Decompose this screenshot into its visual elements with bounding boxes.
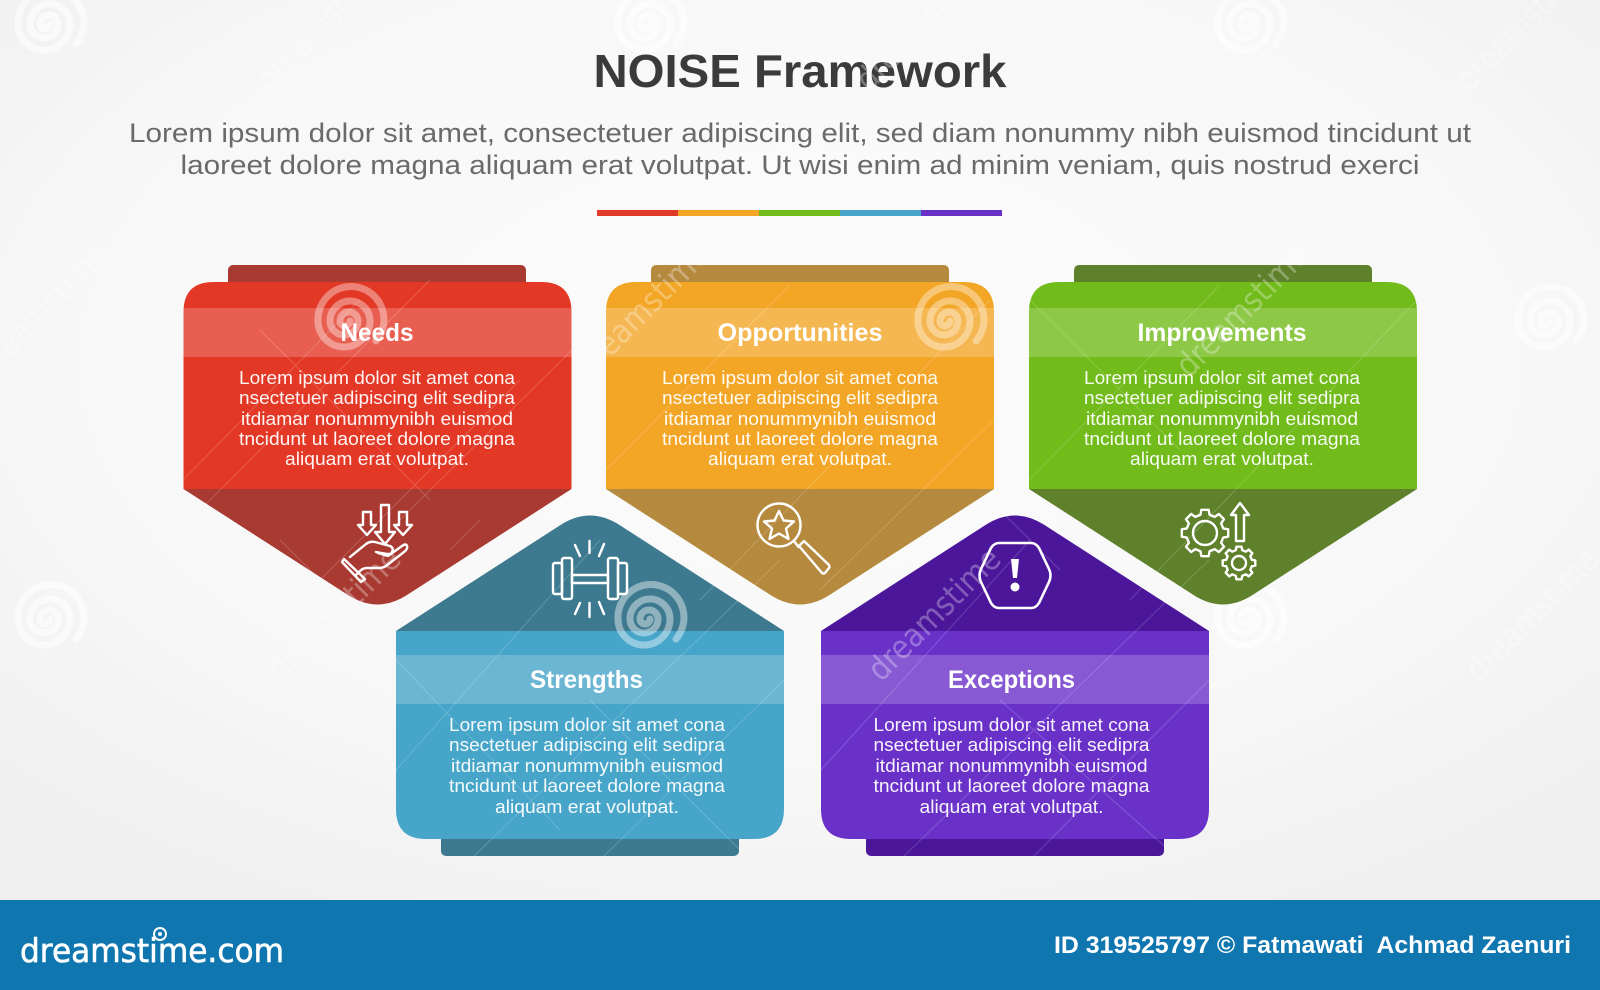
body text: [874, 715, 1151, 817]
subtitle: [129, 118, 1472, 180]
watermark overlay: dreamstime: [1167, 235, 1316, 384]
subtitle: Lorem ipsum dolor sit amet, consectetuer adipiscing elit, sed diam nonummy nibh euismod tincidunt ut: [129, 118, 1472, 148]
tab: [228, 265, 526, 282]
heading band: [821, 655, 1209, 704]
card body: [184, 282, 572, 489]
body text: nsectetuer adipiscing elit sedipra: [874, 735, 1151, 755]
icon: hand with arrows: [342, 505, 412, 582]
body text: tncidunt ut laoreet dolore magna: [874, 776, 1151, 796]
panel: Improvements: [1029, 265, 1417, 604]
body text: Lorem ipsum dolor sit amet cona: [239, 368, 516, 388]
icon: magnifier with star: [758, 504, 830, 574]
watermark overlay: dreamstime: [259, 539, 408, 688]
body text: aliquam erat volutpat.: [495, 797, 679, 817]
icon: warning hexagon: [980, 543, 1050, 608]
card body: [1029, 282, 1417, 489]
body text: aliquam erat volutpat.: [285, 449, 469, 469]
card body: [821, 631, 1209, 839]
body text: Lorem ipsum dolor sit amet cona: [874, 715, 1151, 735]
heading band: [606, 308, 994, 357]
arrow base: [821, 516, 1209, 631]
body text: itdiamar nonummynibh euismod: [876, 756, 1148, 776]
body text: nsectetuer adipiscing elit sedipra: [1084, 388, 1361, 408]
body text: itdiamar nonummynibh euismod: [241, 409, 513, 429]
body text: nsectetuer adipiscing elit sedipra: [449, 735, 726, 755]
body text: [662, 368, 939, 469]
tab: [866, 839, 1164, 856]
tab: [651, 265, 949, 282]
panel: Strengths: [396, 516, 784, 856]
heading: Strengths: [530, 666, 643, 694]
panel: Opportunities: [606, 265, 994, 604]
body text: nsectetuer adipiscing elit sedipra: [239, 388, 516, 408]
body text: Lorem ipsum dolor sit amet cona: [449, 715, 726, 735]
body text: tncidunt ut laoreet dolore magna: [662, 429, 939, 449]
arrow base: [396, 516, 784, 631]
panel: Exceptions: [821, 516, 1209, 856]
tab: [1074, 265, 1372, 282]
arrow base: [1029, 489, 1417, 604]
tab: [441, 839, 739, 856]
panel: Needs: [184, 265, 572, 604]
body text: [239, 368, 516, 469]
card body: [606, 282, 994, 489]
heading: Opportunities: [718, 319, 882, 347]
watermark spirals on background: [18, 0, 1584, 645]
title: NOISE Framework: [594, 45, 1007, 97]
watermark overlay: dreamstime: [567, 235, 716, 384]
body text: tncidunt ut laoreet dolore magna: [1084, 429, 1361, 449]
footer banner: [0, 900, 1600, 990]
heading band: [184, 308, 572, 357]
body text: aliquam erat volutpat.: [920, 797, 1104, 817]
body text: Lorem ipsum dolor sit amet cona: [662, 368, 939, 388]
body text: tncidunt ut laoreet dolore magna: [449, 776, 726, 796]
icon: dumbbell: [553, 541, 627, 617]
heading: Exceptions: [948, 666, 1075, 694]
rainbow divider: [597, 210, 1002, 216]
heading band: [396, 655, 784, 704]
body text: [1084, 368, 1361, 469]
body text: itdiamar nonummynibh euismod: [451, 756, 723, 776]
card body: [396, 631, 784, 839]
body text: aliquam erat volutpat.: [1130, 449, 1314, 469]
body text: itdiamar nonummynibh euismod: [664, 409, 936, 429]
footer logo: dreamstime.com: [20, 931, 284, 970]
heading band: [1029, 308, 1417, 357]
body text: nsectetuer adipiscing elit sedipra: [662, 388, 939, 408]
body text: Lorem ipsum dolor sit amet cona: [1084, 368, 1361, 388]
arrow base: [606, 489, 994, 604]
heading: Improvements: [1138, 319, 1306, 347]
body text: [449, 715, 726, 817]
body text: tncidunt ut laoreet dolore magna: [239, 429, 516, 449]
heading: Needs: [340, 319, 414, 347]
watermark overlay: dreamstime: [859, 539, 1008, 688]
icon: gears with up arrow: [1182, 503, 1255, 579]
arrow base: [184, 489, 572, 604]
footer credit: ID 319525797 © Fatmawati Achmad Zaenuri: [1054, 932, 1571, 959]
body text: aliquam erat volutpat.: [708, 449, 892, 469]
subtitle: laoreet dolore magna aliquam erat volutpat. Ut wisi enim ad minim veniam, quis nostrud exerci: [180, 150, 1420, 180]
body text: itdiamar nonummynibh euismod: [1086, 409, 1358, 429]
